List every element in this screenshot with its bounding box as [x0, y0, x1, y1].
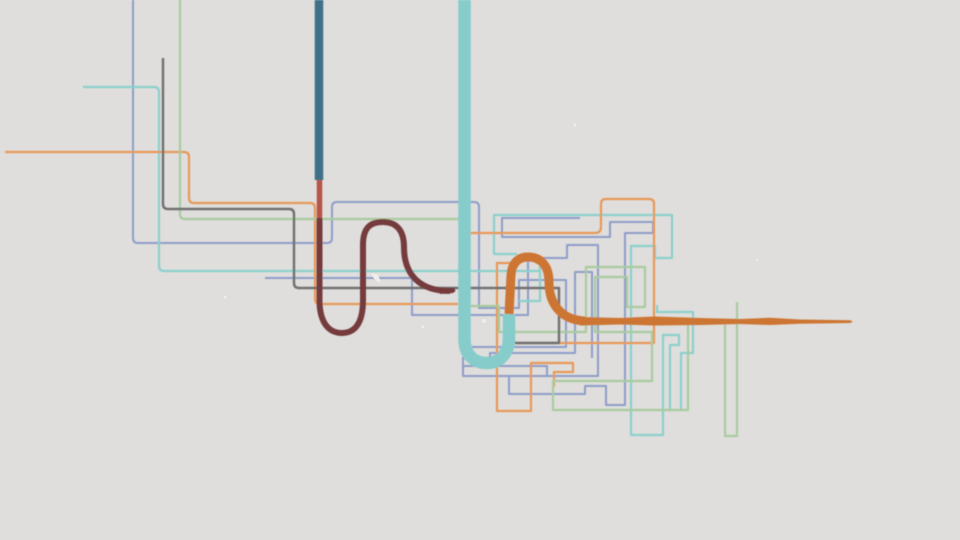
thick steel blue segment [315, 0, 323, 180]
thin green lines [180, 0, 737, 436]
paper specks [224, 124, 758, 328]
thin periwinkle lines [133, 0, 653, 405]
thin orange lines [5, 152, 654, 411]
thick teal U curve [464, 0, 509, 363]
red transition segment [317, 180, 322, 225]
thin teal lines [83, 87, 693, 435]
thick dark brown curve [320, 218, 455, 333]
all lines [5, 0, 853, 436]
thin grey line [163, 58, 559, 343]
thick orange curve with tapering tail [509, 257, 853, 326]
